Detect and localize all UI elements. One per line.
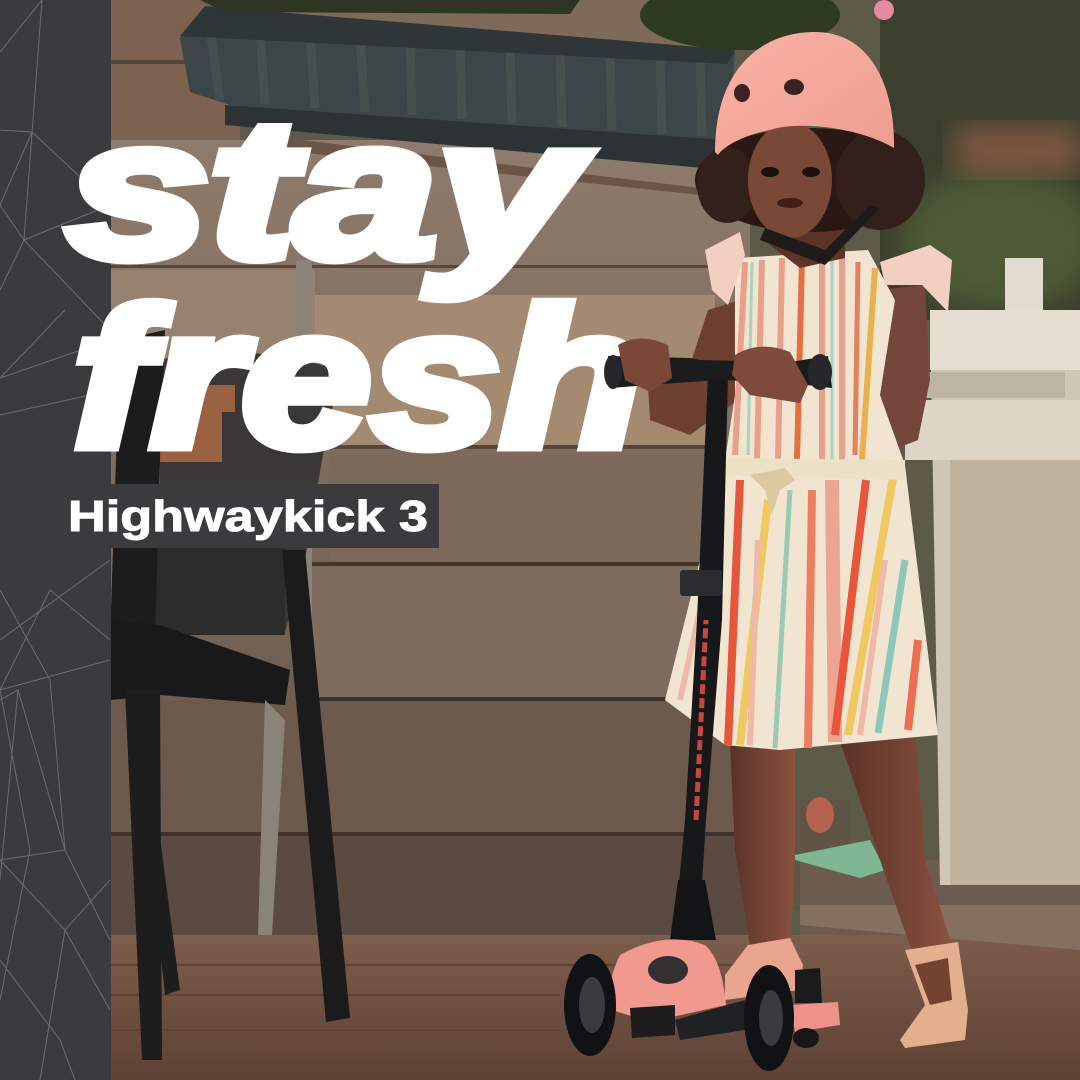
wheels — [564, 954, 616, 1056]
title: stay fresh: fresh — [73, 268, 643, 488]
chair — [110, 330, 350, 1060]
panel geometric line pattern — [0, 0, 110, 1080]
helmet — [715, 32, 894, 155]
white wall at right — [930, 310, 1080, 885]
title: stay fresh — [67, 79, 643, 488]
deck and body — [610, 939, 726, 1022]
scooter — [564, 375, 840, 1071]
neck and face — [770, 215, 845, 268]
legs — [730, 745, 795, 950]
handlebar in front of the title — [604, 354, 832, 390]
title: stay fresh: stay — [67, 79, 590, 299]
hair — [695, 128, 925, 232]
chin strap — [760, 205, 880, 265]
child — [648, 32, 968, 1048]
left dark panel — [0, 0, 111, 1080]
sandals — [900, 942, 968, 1048]
arms — [648, 300, 740, 435]
hands on handlebar — [618, 338, 808, 403]
planter box — [180, 0, 894, 195]
product label: Highwaykick 3 — [66, 484, 439, 548]
ruffles — [705, 232, 745, 305]
dress — [665, 250, 938, 750]
product label: Highwaykick 3: Highwaykick 3 — [68, 492, 428, 541]
